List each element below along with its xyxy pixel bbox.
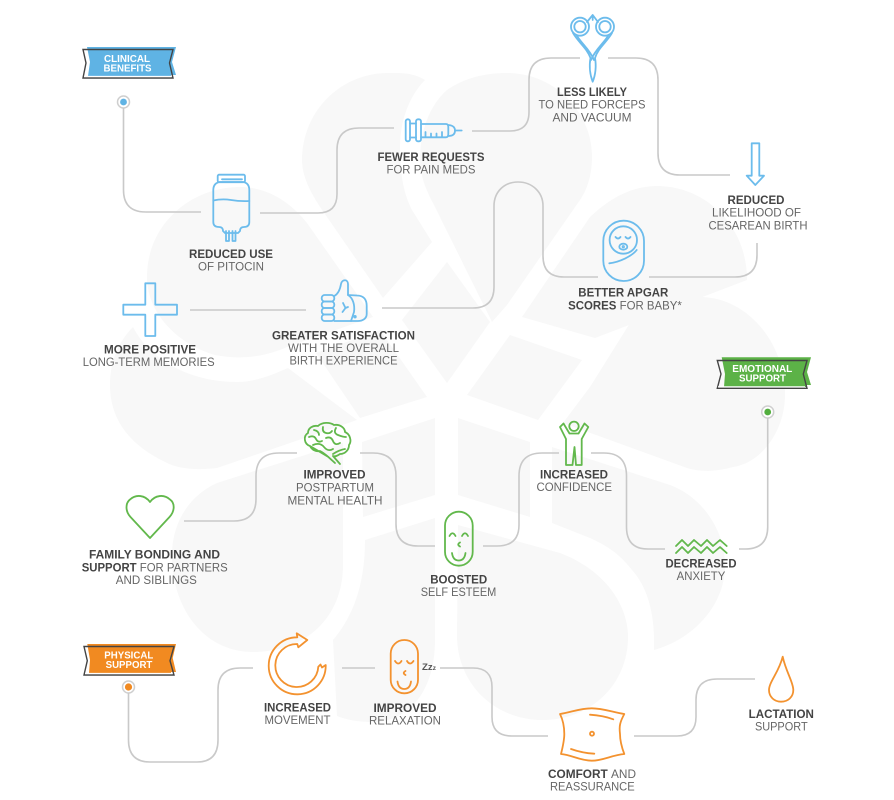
fewer requests for pain meds: FOR PAIN MEDS: [386, 163, 476, 177]
improved relaxation: RELAXATION: [369, 714, 441, 728]
banner: physical support: [84, 644, 176, 675]
comfort and reassurance: REASSURANCE: [550, 780, 635, 794]
icon: milk drop: [769, 657, 793, 702]
less likely to need forceps and vacuum: [538, 15, 646, 124]
section: emotional support: [82, 357, 811, 599]
banner: physical support: SUPPORT: [106, 660, 152, 671]
greater satisfaction: WITH THE OVERALL: [288, 341, 399, 355]
reduced likelihood of cesarean birth: REDUCED: [728, 193, 785, 207]
icon: IV bag: [213, 175, 249, 241]
banner: clinical benefits: CLINICAL: [104, 54, 150, 65]
decreased anxiety: ANXIETY: [677, 569, 725, 583]
icon: pillow: [560, 708, 624, 761]
lactation support: SUPPORT: [755, 720, 808, 734]
icon: down arrow: [747, 143, 764, 185]
family bonding and support: SUPPORT FOR PARTNERS: [82, 560, 228, 574]
icon: smiling face: [445, 512, 473, 566]
connector path: emotional: [184, 418, 768, 549]
improved relaxation: [369, 640, 441, 728]
family bonding and support: FAMILY BONDING AND: [89, 548, 220, 562]
increased confidence: [537, 422, 612, 494]
family bonding and support: AND SIBLINGS: [116, 573, 197, 587]
better apgar scores for baby: BETTER APGAR: [578, 286, 669, 300]
banner: emotional support: [717, 357, 811, 388]
more positive long-term memories: MORE POSITIVE: [104, 342, 196, 356]
less likely to need forceps and vacuum: TO NEED FORCEPS: [538, 98, 646, 112]
improved postpartum mental health: [288, 423, 382, 507]
fewer requests for pain meds: [378, 119, 484, 177]
improved postpartum mental health: MENTAL HEALTH: [288, 493, 382, 507]
icon: syringe: [406, 119, 462, 141]
background flower watermark: [110, 73, 785, 722]
banner: clinical benefits: [83, 47, 176, 78]
increased confidence: CONFIDENCE: [537, 480, 612, 494]
icon: swaddled baby: [603, 221, 644, 281]
fewer requests for pain meds: FEWER REQUESTS: [378, 150, 484, 164]
reduced likelihood of cesarean birth: CESAREAN BIRTH: [708, 218, 808, 232]
start dot: physical: [122, 681, 134, 693]
section: physical support: [84, 633, 814, 794]
increased movement: [264, 633, 331, 727]
more positive long-term memories: [83, 283, 215, 369]
improved postpartum mental health: IMPROVED: [304, 467, 366, 481]
banner: emotional support: EMOTIONAL: [732, 364, 792, 375]
icon: heart: [126, 496, 174, 538]
lactation support: [749, 657, 814, 734]
banner: emotional support: SUPPORT: [739, 374, 786, 385]
reduced use of pitocin: REDUCED USE: [189, 247, 273, 261]
better apgar scores for baby: [568, 221, 682, 312]
reduced likelihood of cesarean birth: LIKELIHOOD OF: [712, 206, 801, 220]
section: clinical benefits: [83, 15, 808, 369]
start dot: emotional: [762, 406, 774, 418]
boosted self esteem: [421, 512, 496, 599]
lactation support: LACTATION: [749, 707, 814, 721]
icon: brain: [305, 423, 350, 464]
banner: physical support: PHYSICAL: [104, 650, 153, 661]
less likely to need forceps and vacuum: LESS LIKELY: [557, 85, 627, 99]
more positive long-term memories: LONG-TERM MEMORIES: [83, 355, 215, 369]
icon: sleeping face: [391, 640, 418, 693]
greater satisfaction: [272, 280, 415, 368]
increased movement: INCREASED: [264, 700, 331, 714]
banner: clinical benefits: BENEFITS: [104, 64, 152, 74]
decreased anxiety: DECREASED: [666, 556, 737, 570]
increased movement: MOVEMENT: [264, 713, 331, 727]
connector path: clinical: [124, 58, 757, 310]
increased confidence: INCREASED: [540, 467, 608, 481]
boosted self esteem: BOOSTED: [430, 572, 488, 586]
icon: thumbs up: [322, 280, 367, 321]
less likely to need forceps and vacuum: AND VACUUM: [552, 110, 632, 124]
better apgar scores for baby: SCORES FOR BABY*: [568, 298, 682, 312]
boosted self esteem: SELF ESTEEM: [421, 585, 496, 599]
improved postpartum mental health: POSTPARTUM: [296, 480, 374, 494]
improved relaxation: IMPROVED: [374, 701, 437, 715]
comfort and reassurance: COMFORT AND: [548, 767, 636, 781]
reduced likelihood of cesarean birth: [708, 143, 808, 232]
sleep letters: Zzz: [422, 662, 436, 672]
icon: person arms raised: [560, 422, 588, 465]
family bonding and support: [82, 496, 228, 587]
greater satisfaction: GREATER SATISFACTION: [272, 328, 415, 342]
icon: zigzag: [676, 540, 727, 553]
icon: circular arrow: [269, 633, 326, 694]
reduced use of pitocin: [189, 175, 273, 274]
start dot: clinical: [118, 96, 130, 108]
greater satisfaction: BIRTH EXPERIENCE: [290, 354, 398, 368]
icon: plus: [123, 283, 177, 336]
connector path: physical: [128, 668, 755, 762]
reduced use of pitocin: OF PITOCIN: [198, 260, 264, 274]
comfort and reassurance: [548, 708, 636, 794]
icon: forceps: [571, 15, 614, 82]
decreased anxiety: [666, 540, 737, 583]
